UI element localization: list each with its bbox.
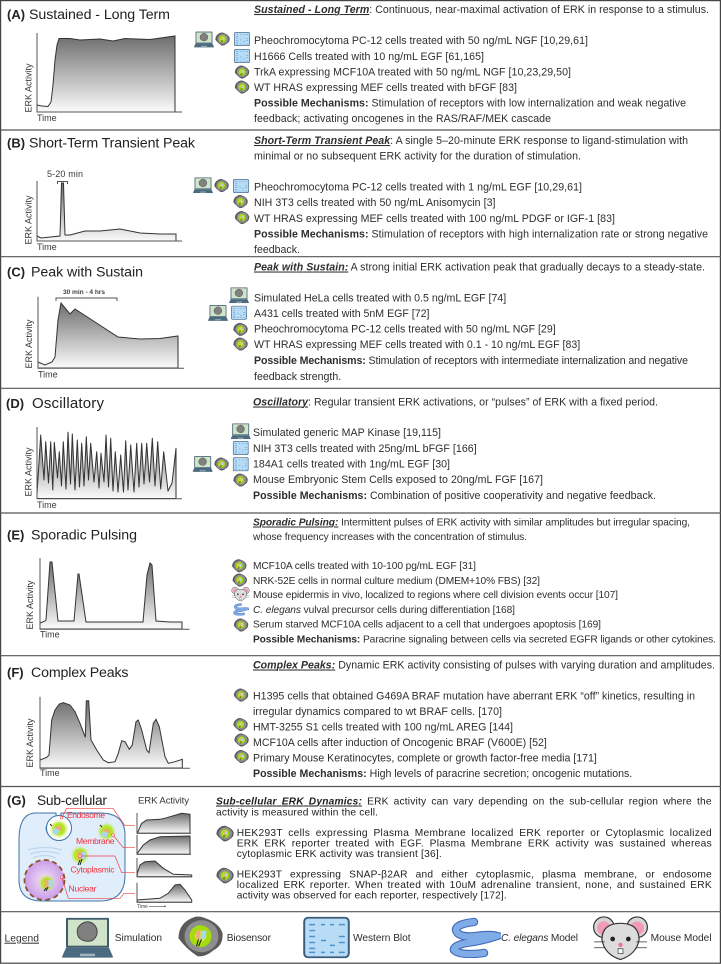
description C: Peak with Sustain: A strong initial ERK activation peak that gradually decays to a steady-state. (254, 262, 705, 274)
description B: WT HRAS expressing MEF cells treated with 100 ng/mL PDGF or IGF-1 [83] (254, 213, 615, 225)
description G: activity was observed for each reporter, respectively [172]. (237, 890, 507, 902)
description F: Primary Mouse Keratinocytes, complete or growth factor-free media [171] (253, 752, 597, 764)
description B: feedback. (254, 244, 300, 256)
compartment labels: Nuclear (68, 884, 97, 894)
panel C: peak with sustain (7, 262, 705, 383)
chart F (25, 697, 190, 778)
icons G (216, 826, 234, 883)
description C: Possible Mechanisms: Stimulation of receptors with intermediate internalization and negative (254, 355, 688, 367)
description G: cytoplasmic ERK activity was transient [36]. (237, 849, 442, 860)
heading B: Short-Term Transient Peak (29, 136, 196, 152)
legend: C. elegans (454, 922, 578, 954)
legend: western blot: Western Blot (353, 933, 411, 944)
legend title: Legend (4, 934, 39, 945)
description E: Serum starved MCF10A cells adjacent to a cell that undergoes apoptosis [169] (253, 620, 601, 630)
description G: HEK293T cells expressing Plasma Membrane localized ERK reporter or Cytoplasmic localized (237, 828, 712, 839)
description F: H1395 cells that obtained G469A BRAF mutation have aberrant ERK “off” kinetics, resulting in (253, 690, 695, 702)
description D: 184A1 cells treated with 1ng/mL EGF [30] (253, 458, 450, 470)
heading E: Sporadic Pulsing (31, 527, 137, 543)
legend: mouse: Mouse Model (651, 933, 712, 944)
description A: Pheochromocytoma PC-12 cells treated with 50 ng/mL NGF [10,29,61] (254, 35, 588, 47)
legend (4, 916, 712, 960)
heading B: (B) (7, 136, 25, 151)
chart F: ERK Activity (25, 718, 35, 768)
cell diagram (19, 813, 125, 901)
description B: Short-Term Transient Peak: A single 5–20-minute ERK response to ligand-stimulation with (254, 135, 688, 147)
sub-cellular ERK charts: Time (137, 904, 148, 910)
legend: simulation (62, 918, 162, 958)
heading F: Complex Peaks (31, 665, 128, 681)
legend: biosensor: Biosensor (227, 933, 272, 944)
chart B: Time (37, 242, 57, 252)
chart E: Time (40, 630, 60, 640)
description B: minimal or no subsequent ERK activity for the duration of stimulation. (254, 150, 581, 162)
description F: MCF10A cells after induction of Oncogenic BRAF (V600E) [52] (253, 737, 547, 749)
chart C: 30 min - 4 hrs (63, 289, 105, 296)
legend: western blot (304, 918, 411, 957)
legend: mouse (594, 917, 712, 960)
compartment labels: Cytoplasmic (70, 864, 115, 874)
chart A: Time (37, 113, 57, 123)
description G: localized ERK reporter. When treated with 10uM adrenaline transient, none, and sustained ERK (237, 880, 712, 891)
description G: HEK293T expressing SNAP-β2AR and either cytoplasmic, plasma membrane, or endosome (237, 870, 712, 880)
description C: Pheochromocytoma PC-12 cells treated with 50 ng/mL NGF [29] (254, 324, 556, 336)
legend: simulation: Simulation (115, 933, 162, 944)
description F (253, 660, 715, 780)
panel D: oscillatory (6, 395, 658, 510)
chart C (24, 289, 184, 380)
description E (252, 518, 716, 646)
heading C: Peak with Sustain (31, 265, 143, 281)
heading A: (A) (7, 7, 25, 22)
heading C: (C) (7, 265, 25, 280)
chart A: ERK Activity (24, 63, 34, 113)
chart E: ERK Activity (25, 580, 35, 630)
icons E (232, 559, 249, 632)
description G: Sub-cellular ERK Dynamics: ERK activity can vary depending on the sub-cellular region where the (216, 796, 712, 808)
chart C: Time (38, 370, 58, 380)
compartment labels: Membrane (76, 836, 115, 846)
chart A (24, 33, 182, 123)
description C: Simulated HeLa cells treated with 0.5 ng/mL EGF [74] (254, 292, 506, 304)
description E: whose frequency increases with the concentration of stimulus. (252, 532, 527, 543)
description D: Simulated generic MAP Kinase [19,115] (253, 427, 441, 439)
description E: MCF10A cells treated with 10-100 pg/mL EGF [31] (253, 561, 476, 572)
description A: TrkA expressing MCF10A treated with 50 ng/mL NGF [10,23,29,50] (254, 66, 571, 78)
chart B: 5-20 min (47, 169, 83, 179)
description F: Complex Peaks: Dynamic ERK activity consisting of pulses with varying duration and amplitudes. (253, 660, 715, 672)
description E: NRK-52E cells in normal culture medium (DMEM+10% FBS) [32] (253, 576, 540, 587)
description F: irregular dynamics compared to wt BRAF cells. [170] (253, 706, 502, 718)
heading A: Sustained - Long Term (29, 7, 170, 23)
leader lines (60, 808, 135, 898)
description G: ERK ERK reporter treated with EGF. Plasma Membrane ERK activity was sustained whereas (237, 838, 712, 850)
description C: A431 cells treated with 5nM EGF [72] (254, 308, 430, 320)
heading E: (E) (7, 527, 24, 542)
compartment labels: Endosome (67, 810, 105, 820)
description D: Mouse Embryonic Stem Cells exposed to 20ng/mL FGF [167] (253, 474, 543, 486)
chart D: Time (37, 500, 57, 510)
chart B (24, 169, 182, 252)
icons C (208, 287, 249, 351)
icons B (193, 177, 249, 224)
description G: activity is measured within the cell. (216, 808, 378, 818)
chart E (25, 558, 190, 640)
chart D: ERK Activity (24, 447, 34, 497)
description C (254, 262, 705, 383)
panel G: sub-cellular (7, 793, 712, 910)
heading G: (G) (7, 793, 26, 808)
panel A: sustained long term (7, 4, 709, 125)
description D: Oscillatory: Regular transient ERK activations, or “pulses” of ERK with a fixed period. (253, 396, 658, 408)
heading D: (D) (6, 396, 24, 411)
description C: feedback strength. (254, 371, 341, 383)
description E: Possible Mechanisms: Paracrine signaling between cells via secreted EGFR ligands or other cytokines. (253, 634, 716, 646)
legend: C. elegans: C. elegans Model (501, 933, 578, 944)
icons A (194, 32, 250, 94)
description D: NIH 3T3 cells treated with 25ng/mL bFGF [166] (253, 443, 477, 455)
description E: Sporadic Pulsing: Intermittent pulses of ERK activity with similar amplitudes but irregular spacing, (253, 518, 690, 528)
description B: Possible Mechanisms: Stimulation of receptors with high internalization rate or strong negative (254, 228, 708, 240)
description E: C. elegans vulval precursor cells during differentiation [168] (253, 605, 515, 616)
heading D: Oscillatory (32, 395, 104, 412)
chart B: ERK Activity (24, 195, 34, 245)
sub-cellular ERK charts (137, 795, 192, 910)
sub-cellular ERK charts: ERK Activity (138, 795, 189, 806)
panel E: sporadic pulsing (7, 518, 716, 646)
chart D (24, 427, 182, 510)
icons D (193, 423, 251, 487)
description B (254, 135, 708, 256)
description A: Possible Mechanisms: Stimulation of receptors with low internalization and weak negative (254, 98, 686, 110)
chart C: ERK Activity (24, 319, 34, 369)
heading F: (F) (7, 665, 24, 680)
description A: Sustained - Long Term: Continuous, near-maximal activation of ERK in response to a stimulus. (254, 4, 709, 16)
description E: Mouse epidermis in vivo, localized to regions where cell division events occur [107] (253, 590, 618, 601)
description F: HMT-3255 S1 cells treated with 100 ng/mL AREG [144] (253, 722, 513, 734)
heading G: Sub-cellular (37, 793, 107, 808)
compartment labels (67, 810, 115, 894)
description G (216, 796, 712, 902)
chart F: Time (40, 768, 60, 778)
description A: feedback; activating oncogenes in the RAS/RAF/MEK cascade (254, 113, 551, 125)
description B: NIH 3T3 cells treated with 50 ng/mL Anisomycin [3] (254, 197, 496, 209)
description D: Possible Mechanisms: Combination of positive cooperativity and negative feedback. (253, 490, 656, 502)
icons F (233, 689, 249, 763)
description D (253, 396, 658, 502)
legend: biosensor (178, 916, 272, 956)
description F: Possible Mechanisms: High levels of paracrine secretion; oncogenic mutations. (253, 768, 632, 780)
description C: WT HRAS expressing MEF cells treated with 0.1 - 10 ng/mL EGF [83] (254, 339, 580, 351)
panel B: short-term transient peak (7, 135, 708, 256)
description A: WT HRAS expressing MEF cells treated with bFGF [83] (254, 82, 517, 94)
description B: Pheochromocytoma PC-12 cells treated with 1 ng/mL EGF [10,29,61] (254, 182, 582, 194)
description A: H1666 Cells treated with 10 ng/mL EGF [61,165] (254, 51, 484, 63)
description A (254, 4, 709, 125)
panel F: complex peaks (7, 660, 715, 780)
